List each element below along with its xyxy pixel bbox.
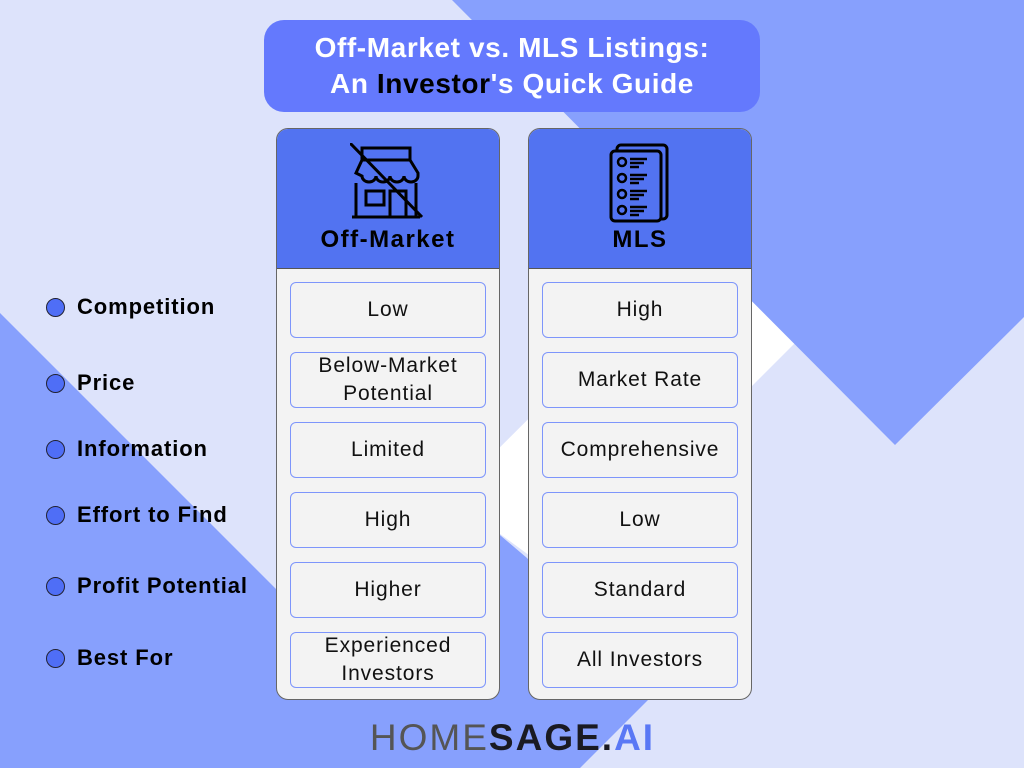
icon: document list xyxy=(610,144,668,222)
panel: MLS: Standard xyxy=(594,578,686,601)
title xyxy=(264,20,760,112)
logo: HOMESAGE.AI xyxy=(370,717,655,758)
icon: crossed-out store xyxy=(350,143,423,218)
cells: off-market values xyxy=(290,282,486,688)
panel: MLS: Comprehensive xyxy=(561,438,719,461)
header: off-market xyxy=(277,129,499,269)
title: An Investor's Quick Guide xyxy=(330,68,694,99)
panel: off-market: Higher xyxy=(354,578,422,601)
row labels: Information xyxy=(77,436,208,461)
row labels: Best For xyxy=(77,645,173,670)
panel: MLS: All Investors xyxy=(577,648,703,671)
panel: MLS: Low xyxy=(619,508,661,531)
row labels: Competition xyxy=(77,294,215,319)
panel: MLS xyxy=(528,128,752,700)
panel: off-market: Potential xyxy=(343,382,433,405)
panel: off-market: Low xyxy=(367,298,409,321)
row labels: Effort to Find xyxy=(77,502,228,527)
title: Off-Market vs. MLS Listings: xyxy=(315,32,709,63)
panel: off-market: Limited xyxy=(351,438,425,461)
panel: MLS: Market Rate xyxy=(578,368,702,391)
row labels: Profit Potential xyxy=(77,573,248,598)
header: MLS xyxy=(529,129,751,269)
cells: MLS values xyxy=(542,282,738,688)
panel: MLS: High xyxy=(617,298,663,321)
header: MLS: MLS xyxy=(612,226,668,253)
row labels xyxy=(46,294,248,670)
panel: off-market: Investors xyxy=(341,662,435,685)
header: off-market: Off-Market xyxy=(320,226,456,253)
row labels: Price xyxy=(77,370,135,395)
panel: off-market: Below-Market xyxy=(318,354,458,377)
panel: off-market xyxy=(276,128,500,700)
panel: off-market: Experienced xyxy=(325,634,451,657)
panel: off-market: High xyxy=(365,508,411,531)
